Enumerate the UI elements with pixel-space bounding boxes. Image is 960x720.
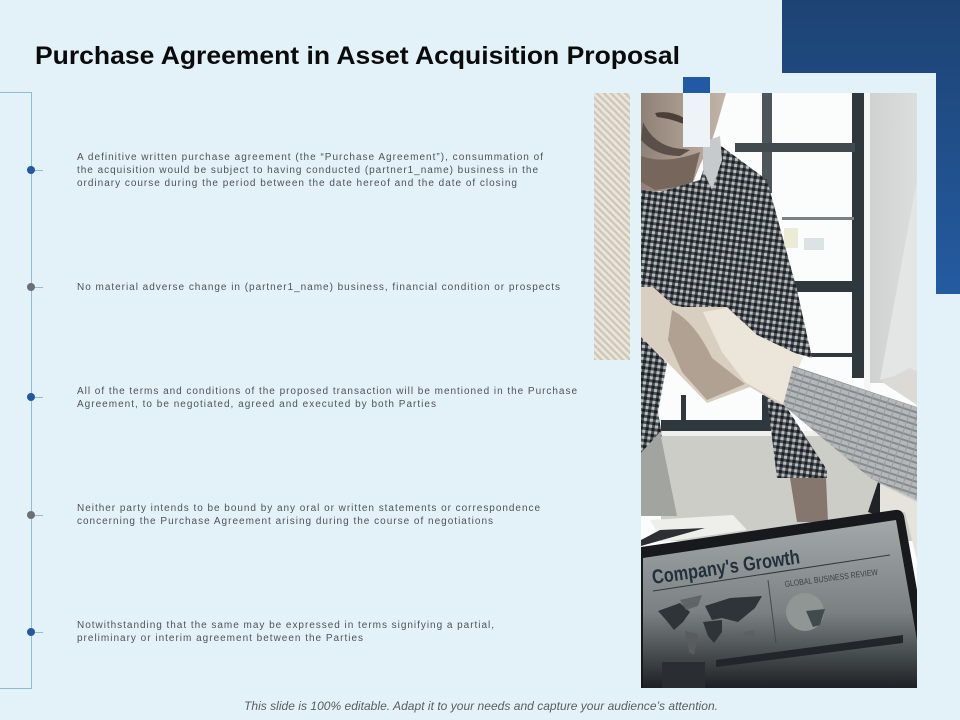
marker 2	[27, 283, 43, 291]
marker 4	[27, 511, 43, 519]
text block: point 4: concerning the Purchase Agreement arising during the course of negotiations	[77, 516, 493, 527]
marker 3	[27, 393, 43, 401]
sticky notes	[784, 228, 798, 248]
right wall	[864, 93, 871, 393]
shirt torso	[641, 140, 812, 358]
back wall below window	[661, 431, 917, 541]
text block: point 5	[77, 620, 494, 644]
handshake	[641, 287, 803, 405]
footer note: This slide is 100% editable. Adapt it to your needs and capture your audience’s attention.	[244, 699, 718, 713]
shirt lower left	[641, 337, 667, 453]
text block: point 1: A definitive written purchase agreement (the “Purchase Agreement”), consummation of	[77, 152, 543, 163]
pie chart	[786, 593, 824, 631]
text block: point 3: All of the terms and conditions of the proposed transaction will be mentioned in the Purchase	[77, 386, 577, 397]
text block: point 4	[77, 503, 540, 527]
title: Purchase Agreement in Asset Acquisition Proposal	[35, 42, 680, 70]
text block: point 1: ordinary course during the period between the date hereof and the date of closing	[77, 178, 517, 189]
screen heading: Company's Growth	[651, 546, 801, 589]
text block: point 5: preliminary or interim agreement between the Parties	[77, 633, 363, 644]
window frame	[661, 93, 864, 431]
timeline bracket with markers	[0, 92, 43, 688]
background person at right	[882, 368, 917, 405]
world map	[658, 595, 762, 655]
overlay tab: blue square	[683, 77, 710, 93]
text block: point 3: Agreement, to be negotiated, agreed and executed by both Parties	[77, 399, 436, 410]
text block: point 2: No material adverse change in (partner1_name) business, financial condition or prospects	[77, 282, 560, 293]
photo: handshake over laptop	[641, 93, 917, 688]
text block: point 4: Neither party intends to be bound by any oral or written statements or correspondence	[77, 503, 540, 514]
trousers and leg	[641, 432, 677, 516]
face	[641, 93, 726, 192]
papers on desk	[650, 515, 747, 542]
shirt lower centre	[767, 398, 827, 478]
text block: point 5: Notwithstanding that the same may be expressed in terms signifying a partial,	[77, 620, 494, 631]
overlay tab: white block	[683, 93, 710, 147]
laptop: GLOBAL BUSINESS REVIEW	[784, 567, 878, 589]
decorative corner block: dark blue	[782, 0, 960, 294]
laptop	[641, 510, 917, 688]
text block: point 1: the acquisition would be subject to having conducted (partner1_name) business in the	[77, 165, 538, 176]
sleeve arm	[783, 366, 917, 500]
text block: point 1	[77, 152, 543, 189]
data table	[716, 635, 903, 667]
marker 5	[27, 628, 43, 636]
text block: point 3	[77, 386, 577, 410]
marker 1	[27, 166, 43, 174]
hatched decorative strip	[594, 93, 630, 360]
